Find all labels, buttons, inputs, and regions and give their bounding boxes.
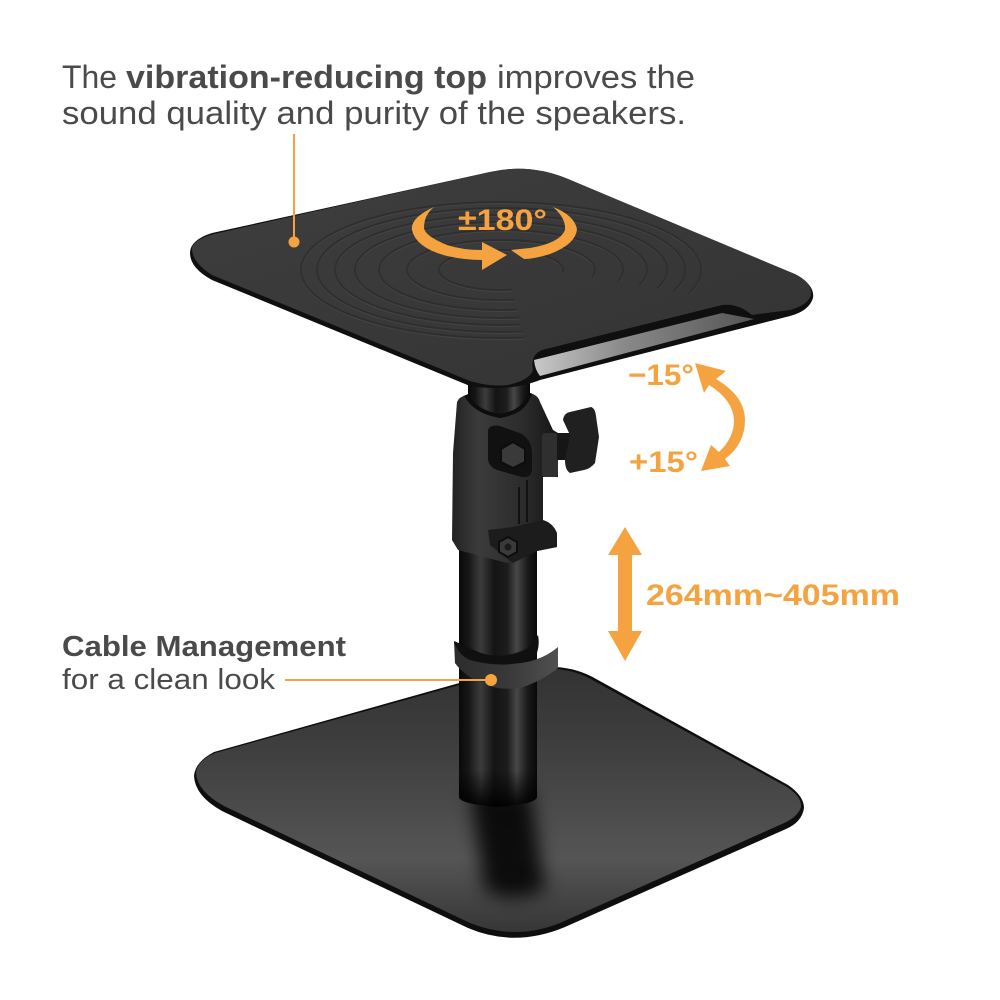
upper neck (468, 376, 530, 426)
label: plus minus 180: ±180° (458, 204, 547, 237)
cable clip (454, 635, 558, 689)
grey strip (534, 313, 754, 376)
concentric rings: shadow (301, 202, 701, 338)
plate surface (192, 169, 811, 386)
heading text: The (62, 59, 117, 95)
tilt joint (452, 376, 599, 563)
height arrow (608, 527, 642, 661)
pole shadow on base (470, 790, 545, 898)
knob (563, 407, 599, 473)
callout line: cable (285, 674, 497, 686)
heading text: improves the (497, 59, 695, 95)
callout line: top (288, 134, 300, 248)
clamp seam (519, 480, 527, 524)
heading text: sound quality and purity of the speakers. (62, 95, 686, 131)
concentric rings: highlight (301, 204, 701, 340)
cable management text: Cable Management (62, 631, 346, 663)
heading text: vibration-reducing top (126, 59, 487, 95)
hex bolt (501, 442, 525, 468)
cable management text: for a clean look (62, 664, 276, 696)
lower pole (459, 540, 537, 807)
knob stem (557, 433, 573, 460)
top plate (190, 169, 813, 388)
clamp body (452, 393, 558, 563)
tilt arrow (695, 363, 745, 471)
height label: 264mm~405mm (646, 579, 900, 612)
label: minus 15: −15° (628, 359, 694, 392)
clamp bolt (499, 537, 517, 557)
collar edge (466, 393, 530, 416)
side plate (542, 433, 558, 477)
slot plate (488, 426, 532, 477)
cable management text (62, 631, 346, 696)
rotation arrows (412, 207, 577, 270)
label: plus 15: +15° (629, 446, 698, 479)
height lock clamp (488, 520, 557, 563)
heading text (62, 59, 695, 131)
base plate (194, 667, 804, 938)
